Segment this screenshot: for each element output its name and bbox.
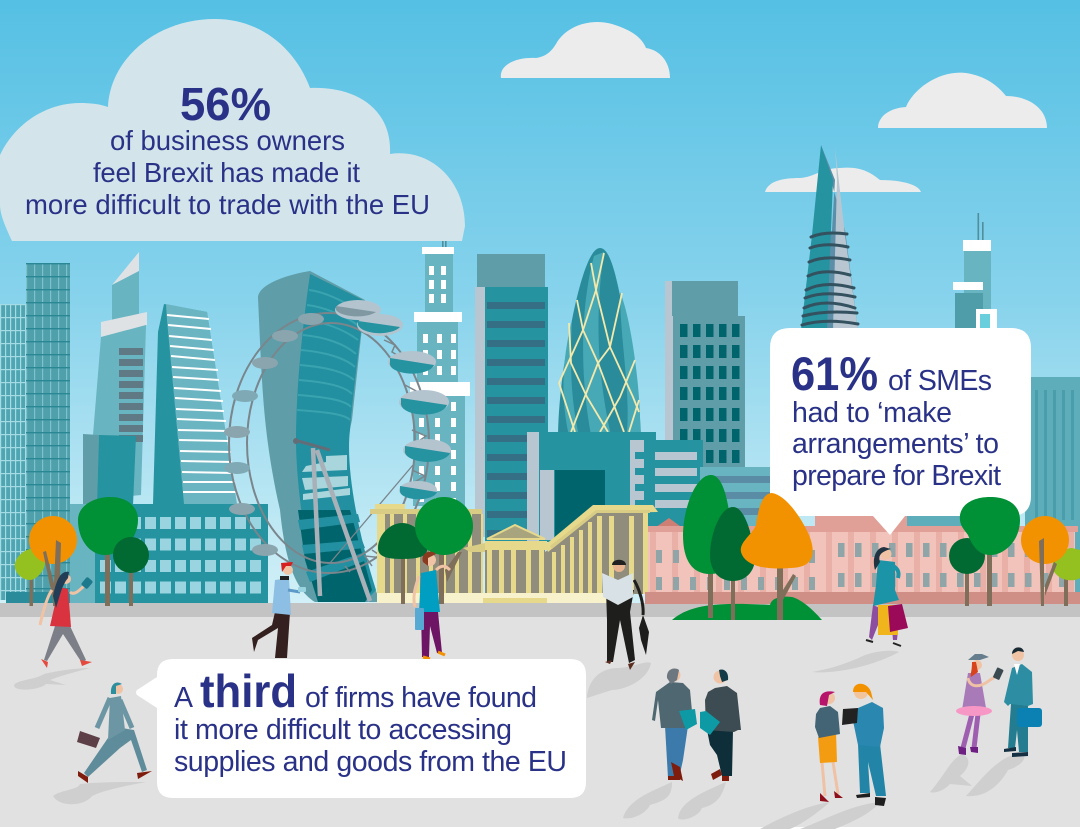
person: man with red hair and phone [252,562,306,658]
gondola [335,300,381,320]
tree: green left [78,497,138,606]
person: balding man with folder [700,669,741,781]
callout: 61% of SMEs: prepare for Brexit [792,460,1001,492]
gondola [357,314,403,336]
shadows [14,651,1024,829]
skyline [0,145,1080,603]
person: man reading newspaper [602,560,649,670]
tree: orange left [29,516,77,606]
statement [25,125,430,220]
tree: green right [960,497,1020,606]
building: angular tower [83,252,147,505]
gondola [252,357,278,369]
gondola [381,513,415,529]
gondola [399,481,437,499]
person: man in grey coat with folder [652,668,697,781]
building: striped tower [153,304,237,504]
tree: pointed dark green [710,507,755,620]
statement: feel Brexit has made it [93,157,360,188]
gondola [298,313,324,325]
callout: a third of firms: of firms have found [305,682,537,714]
gondola [229,503,255,515]
callout: 61% of SMEs: had to ‘make [792,397,952,429]
yellow classical building [370,504,658,603]
callout: 61% of SMEs [770,328,1031,535]
gondola [388,351,436,374]
building: far right tower [953,213,997,334]
gondola [232,390,258,402]
person: woman on phone in teal dress [414,552,450,659]
building: stepped tower with white caps [410,229,470,506]
person: businessman with briefcase [77,682,152,783]
gondola [399,390,449,415]
tree: dark green left [113,537,149,606]
statement: more difficult to trade with the EU [25,189,430,220]
sky background [0,0,1080,605]
cloud shape [0,19,465,241]
cloud: top centre [501,22,670,78]
building: tall stripe block [475,254,548,542]
tree: orange teardrop [741,493,813,620]
trees [15,475,1080,620]
gondola [272,330,298,342]
person: man with blue briefcase [1004,647,1042,757]
tree: dark green centre [378,523,427,604]
person: woman in purple dress with hat [956,654,1004,755]
callout: 61% of SMEs: 61% [791,347,878,400]
callout: 61% of SMEs: arrangements’ to [792,428,999,460]
tree: green centre [415,497,473,604]
pink classical building [645,508,1080,604]
person: woman with tablet [815,691,843,802]
gondola [224,426,250,438]
gondola [403,439,451,462]
tree: orange right [1021,516,1069,606]
building: teal block under the gherkin [527,432,770,542]
building: window tower [665,281,745,476]
large cloud [0,19,465,241]
tree: pointed green [683,475,732,618]
building: curved tower [258,271,380,602]
stat: 56%: 56% [180,78,271,130]
person: man with tablet in blue suit [842,684,886,806]
tree: dark green right [949,538,985,606]
gondola [252,544,278,556]
tree: lime left [15,548,45,606]
person: shopper with bags [866,547,908,646]
ground [0,603,1080,829]
building: gherkin [558,248,641,440]
building: shard [801,145,858,330]
callout: a third of firms [136,659,586,798]
callout: 61% of SMEs: of SMEs [888,365,992,397]
person: woman in red dress [40,572,93,668]
ferris wheel [224,300,451,601]
callout: a third of firms: A [174,682,193,714]
building: far left glass towers [0,263,96,603]
building: far right block [900,377,1080,602]
tree: lime right [1052,548,1080,606]
callout: a third of firms: supplies and goods from the EU [174,746,567,778]
cloud: behind the shard [765,168,921,192]
gondola [224,462,250,474]
callout: a third of firms: it more difficult to accessing [174,714,512,746]
callout: a third of firms: third [200,665,297,717]
statement: of business owners [110,125,345,156]
bush [672,597,822,620]
building: low office block [70,504,268,603]
cloud: top right [878,73,1047,128]
